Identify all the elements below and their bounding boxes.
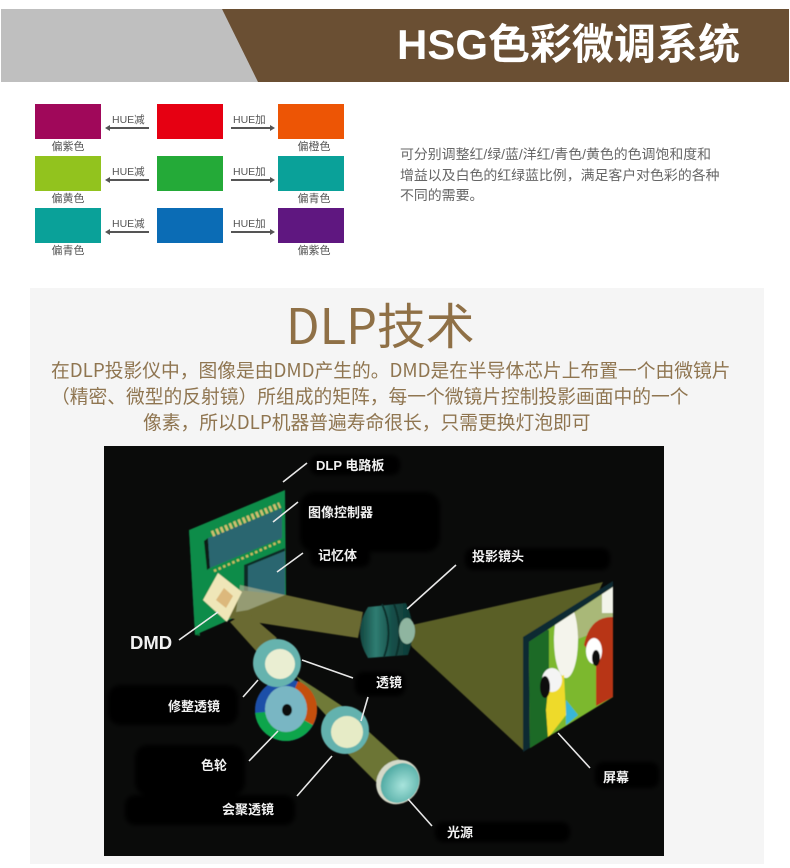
label: image controller: 图像控制器 (308, 505, 373, 520)
hue swatch chart: 偏青色 (298, 193, 330, 205)
description text: 可分别调整红/绿/蓝/洋红/青色/黄色的色调饱和度和 (400, 146, 711, 162)
banner (1, 9, 789, 82)
hue swatch chart: 偏黄色 (52, 193, 84, 205)
label: screen: 屏幕 (603, 770, 629, 785)
hue swatch chart: 偏青色 (52, 245, 84, 257)
light cone to screen (403, 582, 603, 750)
label: projection lens: 投影镜头 (472, 549, 524, 564)
description text (400, 146, 720, 203)
leader lines (179, 463, 590, 826)
beam: color wheel to condenser lens (296, 676, 345, 722)
panel: DLP technology (30, 288, 764, 864)
hue swatch chart: 偏紫色 (298, 245, 330, 257)
hue swatch chart: HUE减 (112, 166, 145, 178)
hue swatch chart (35, 104, 344, 257)
hue swatch chart: HUE加 (233, 166, 266, 178)
screen (523, 581, 617, 755)
label: lens: 透镜 (376, 675, 402, 690)
beam: condenser lens to light source (347, 730, 400, 783)
hue swatch chart: HUE减 (112, 218, 145, 230)
intro text: 在DLP投影仪中，图像是由DMD产生的。DMD是在半导体芯片上布置一个由微镜片 (51, 356, 730, 383)
hue swatch chart: HUE加 (233, 114, 266, 126)
label: trimming lens: 修整透镜 (168, 699, 220, 714)
lens (253, 639, 301, 687)
light source (367, 751, 429, 813)
beam: DMD to projection lens (228, 590, 363, 638)
label: DMD: DMD (130, 632, 172, 653)
description text: 增益以及白色的红绿蓝比例，满足客户对色彩的各种 (400, 166, 720, 182)
projection lens (360, 603, 415, 658)
label: memory: 记忆体 (318, 548, 357, 563)
description text: 不同的需要。 (400, 187, 483, 203)
DLP projector diagram (104, 446, 664, 856)
label: DLP circuit board: DLP 电路板 (316, 458, 384, 473)
hue swatch chart: 偏紫色 (52, 141, 84, 153)
label: color wheel: 色轮 (201, 758, 227, 773)
title: HSG色彩微调系统 (397, 21, 740, 68)
hue swatch chart: HUE减 (112, 114, 145, 126)
color wheel (255, 679, 317, 741)
hue swatch chart: HUE加 (233, 218, 266, 230)
circuit board (189, 490, 286, 636)
condenser lens (321, 706, 369, 754)
beam: DMD to lens (230, 612, 277, 652)
intro text: 像素，所以DLP机器普遍寿命很长，只需更换灯泡即可 (143, 408, 590, 435)
intro text: （精密、微型的反射镜）所组成的矩阵，每一个微镜片控制投影画面中的一个 (51, 382, 688, 409)
heading: DLP技术 (286, 288, 475, 359)
label: light source: 光源 (447, 825, 473, 840)
intro text (51, 356, 730, 435)
DMD chip (203, 573, 242, 622)
label: condenser lens: 会聚透镜 (222, 802, 274, 817)
hue swatch chart: 偏橙色 (298, 141, 330, 153)
